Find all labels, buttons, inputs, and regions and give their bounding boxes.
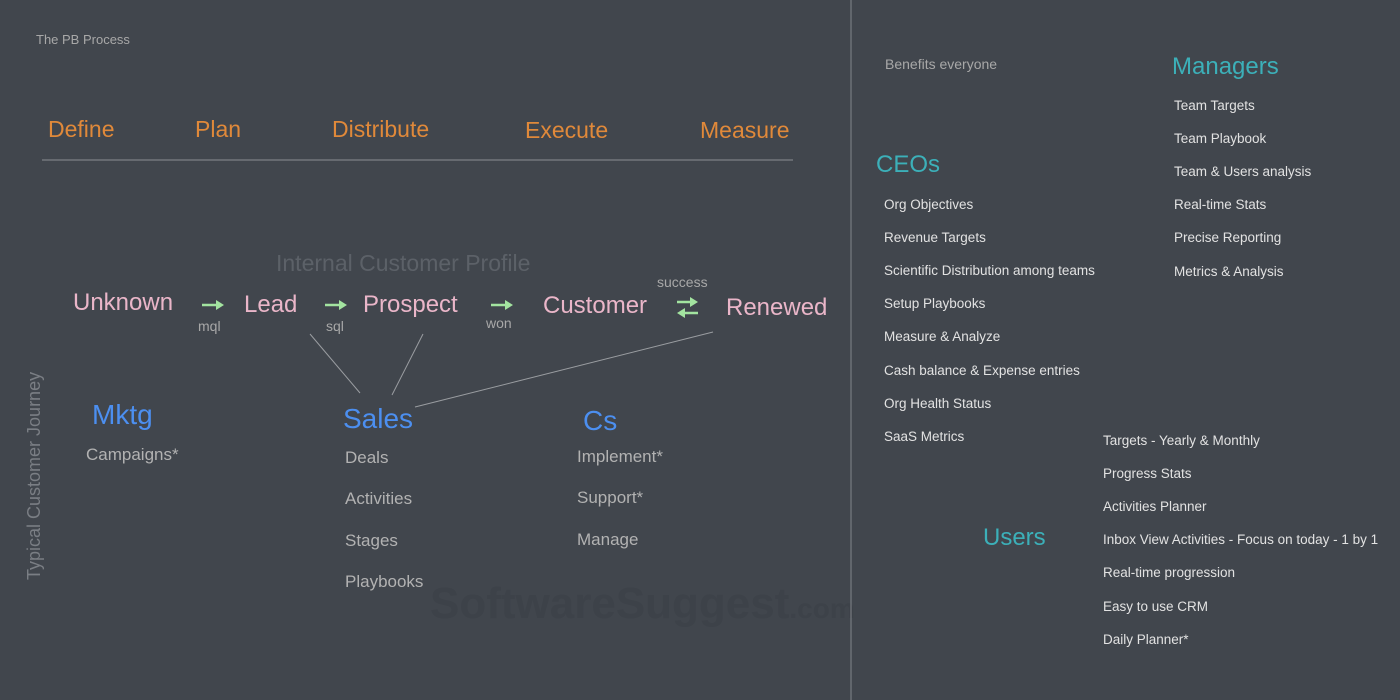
transition labels: [198, 274, 708, 334]
CEOs list: Measure & Analyze: [884, 329, 1000, 344]
CEOs list: Scientific Distribution among teams: [884, 263, 1095, 278]
users list: Inbox View Activities - Focus on today - 1 by 1: [1103, 532, 1378, 547]
process steps: [48, 116, 789, 143]
CEOs list: Revenue Targets: [884, 230, 986, 245]
CEOs list: [884, 197, 1095, 444]
CEOs list: Cash balance & Expense entries: [884, 363, 1080, 378]
CEOs list: Setup Playbooks: [884, 296, 986, 311]
users list: [1103, 433, 1378, 647]
team items: Manage: [577, 530, 638, 549]
managers list: Team Playbook: [1174, 131, 1267, 146]
users list: Easy to use CRM: [1103, 599, 1208, 614]
customer journey stages: Lead: [244, 291, 297, 318]
team items: Campaigns*: [86, 445, 179, 464]
transition labels: sql: [326, 318, 344, 334]
team items: Playbooks: [345, 572, 423, 591]
headings: roles: CEOs: [876, 151, 940, 178]
transition labels: success: [657, 274, 708, 290]
headings: roles: [876, 53, 1279, 551]
team items: Activities: [345, 489, 412, 508]
users list: Real-time progression: [1103, 565, 1235, 580]
process steps: Distribute: [332, 116, 429, 142]
team items: [86, 445, 663, 591]
team items: Stages: [345, 531, 398, 550]
process steps: Define: [48, 116, 114, 142]
benefits heading: Benefits everyone: [885, 56, 997, 72]
users list: Activities Planner: [1103, 499, 1207, 514]
customer journey stages: Unknown: [73, 289, 173, 316]
managers list: Metrics & Analysis: [1174, 264, 1284, 279]
connector lines: [310, 332, 713, 407]
managers list: Team & Users analysis: [1174, 164, 1312, 179]
team items: Support*: [577, 488, 644, 507]
teams: Mktg: [92, 399, 153, 430]
process steps: Execute: [525, 117, 608, 143]
managers list: Real-time Stats: [1174, 197, 1267, 212]
transition labels: won: [485, 315, 512, 331]
customer journey stages: [73, 289, 827, 321]
managers list: Precise Reporting: [1174, 230, 1281, 245]
users list: Targets - Yearly & Monthly: [1103, 433, 1260, 448]
users list: Progress Stats: [1103, 466, 1192, 481]
managers list: Team Targets: [1174, 98, 1255, 113]
customer journey stages: Renewed: [726, 294, 827, 321]
customer journey stages: Customer: [543, 292, 647, 319]
transition arrows: [202, 297, 698, 318]
watermark: SoftwareSuggest.com: [430, 579, 855, 628]
teams: [92, 399, 617, 436]
users list: Daily Planner*: [1103, 632, 1189, 647]
transition labels: mql: [198, 318, 221, 334]
customer journey stages: Prospect: [363, 291, 458, 318]
CEOs list: Org Health Status: [884, 396, 992, 411]
CEOs list: SaaS Metrics: [884, 429, 965, 444]
team items: Deals: [345, 448, 388, 467]
managers list: [1174, 98, 1312, 279]
headings: roles: Managers: [1172, 53, 1279, 80]
process steps: Plan: [195, 116, 241, 142]
teams: Sales: [343, 403, 413, 434]
CEOs list: Org Objectives: [884, 197, 974, 212]
vertical label: Typical Customer Journey: [24, 372, 44, 580]
process steps: Measure: [700, 117, 789, 143]
team items: Implement*: [577, 447, 663, 466]
headings: roles: Users: [983, 524, 1046, 551]
teams: Cs: [583, 405, 617, 436]
title: The PB Process: [36, 32, 130, 47]
subtitle: internal customer profile: Internal Customer Profile: [276, 250, 530, 276]
